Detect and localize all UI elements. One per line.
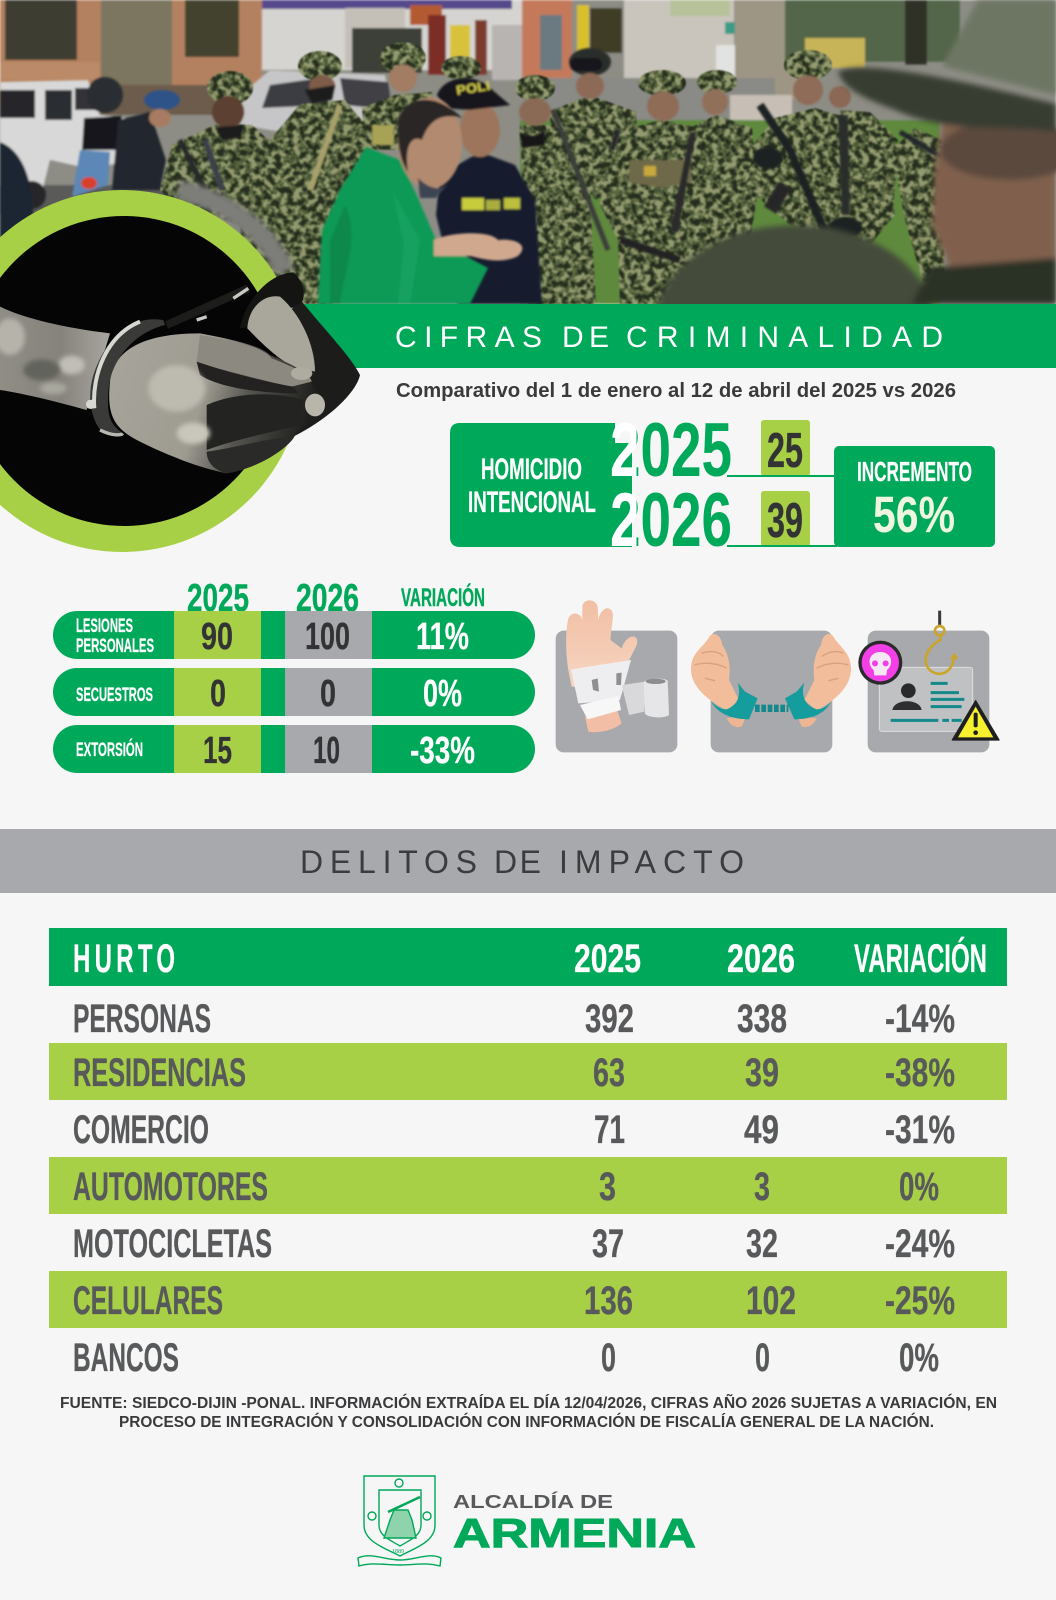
section heading: IMPACTO	[559, 844, 744, 880]
logo: Alcaldía de Armenia	[358, 1476, 696, 1566]
row bancos: 0	[601, 1336, 616, 1380]
handcuffed hands	[0, 272, 360, 473]
row residencias	[49, 1043, 1007, 1100]
photo background: street and buildings	[0, 0, 1056, 304]
row residencias: 39	[745, 1051, 779, 1095]
row: extorsion: 15	[203, 730, 232, 772]
row personas: PERSONAS	[73, 997, 211, 1041]
icon: coat of arms shield: 1889	[392, 1549, 404, 1555]
section heading	[300, 844, 744, 880]
row: lesiones personales: PERSONALES	[76, 636, 154, 657]
increment value: 56%	[873, 486, 955, 543]
row comercio: COMERCIO	[73, 1108, 209, 1152]
row motocicletas: -24%	[885, 1222, 955, 1266]
green box	[450, 423, 632, 547]
lime ring	[0, 190, 303, 552]
row motocicletas: 37	[592, 1222, 624, 1266]
table header: 2026	[727, 937, 795, 981]
black disc	[0, 216, 279, 526]
source note: FUENTE: SIEDCO-DIJIN -PONAL. INFORMACIÓN EXTRAÍDA EL DÍA 12/04/2026, CIFRAS AÑO 2026 SUJETAS A VARIACIÓN, EN	[60, 1392, 997, 1412]
row personas: -14%	[885, 997, 955, 1041]
increment box	[834, 446, 995, 547]
blurred foreground officer shoulder	[656, 222, 934, 304]
table header	[49, 928, 1007, 986]
row celulares: -25%	[885, 1279, 955, 1323]
connector 2026	[727, 545, 837, 547]
row: lesiones personales: LESIONES	[76, 616, 133, 637]
circular handcuffs image	[0, 190, 360, 552]
row bancos: BANCOS	[73, 1336, 179, 1380]
police officer in navy uniform	[436, 78, 542, 304]
header 2025: 2025	[187, 577, 249, 620]
row automotores: AUTOMOTORES	[73, 1165, 268, 1209]
row celulares: 136	[584, 1279, 633, 1323]
small comparison table	[53, 577, 535, 773]
row residencias: RESIDENCIAS	[73, 1051, 246, 1095]
row: extorsion: EXTORSIÓN	[76, 739, 143, 761]
row bancos: 0	[755, 1336, 770, 1380]
green title band	[300, 304, 1056, 368]
row celulares: 102	[746, 1279, 796, 1323]
section heading: DE	[494, 844, 541, 880]
soldier faces, straps and rifles	[180, 48, 938, 260]
section heading: DELITOS	[300, 844, 477, 880]
table header: HURTO	[73, 936, 175, 980]
row motocicletas: 32	[746, 1222, 778, 1266]
icon: handcuffed hands	[691, 631, 851, 752]
row: lesiones personales	[53, 611, 535, 659]
title	[395, 321, 943, 354]
row: secuestros: SECUESTROS	[76, 685, 153, 706]
blurred foreground officer head and hat	[838, 0, 1056, 304]
row automotores: 3	[754, 1165, 770, 1209]
theft table	[49, 928, 1007, 1380]
row: extorsion: 10	[313, 730, 340, 772]
row: extorsion	[53, 725, 535, 773]
row personas: 338	[737, 997, 787, 1041]
row: secuestros	[53, 668, 535, 716]
mayor in green jacket	[318, 97, 522, 304]
year 2026: 2026	[610, 478, 732, 563]
subtitle: Comparativo del 1 de enero al 12 de abril del 2025 vs 2026	[396, 380, 956, 402]
year 2025: 2025	[610, 408, 732, 493]
row: secuestros: 0	[320, 673, 336, 715]
increment label: INCREMENTO	[857, 456, 972, 487]
row automotores: 0%	[899, 1165, 939, 1209]
homicide label second line: INTENCIONAL	[468, 486, 596, 519]
value 2025: 25	[767, 424, 803, 478]
connector 2025	[727, 475, 837, 477]
row comercio: 71	[594, 1108, 625, 1152]
title: DE	[562, 321, 609, 354]
row: extorsion: -33%	[410, 730, 475, 772]
soldiers in camouflage	[160, 42, 945, 304]
title: CRIMINALIDAD	[626, 321, 943, 354]
icon: coat of arms shield	[358, 1476, 441, 1566]
title: CIFRAS	[395, 321, 542, 354]
header 2026: 2026	[296, 577, 359, 620]
source note: PROCESO DE INTEGRACIÓN Y CONSOLIDACIÓN CON INFORMACIÓN DE FISCALÍA GENERAL DE LA NACIÓN.	[119, 1412, 934, 1431]
grey blur behind circle	[178, 190, 285, 272]
wordmark ARMENIA: ARMENIA	[453, 1510, 696, 1556]
row celulares	[49, 1271, 1007, 1328]
row automotores	[49, 1157, 1007, 1214]
source note	[60, 1392, 997, 1431]
row residencias: -38%	[885, 1051, 955, 1095]
row comercio: 49	[744, 1108, 779, 1152]
row automotores: 3	[599, 1165, 616, 1209]
row: secuestros: 0%	[423, 673, 462, 715]
lime value box 2026	[761, 491, 810, 547]
row bancos	[73, 1336, 939, 1380]
row personas	[73, 997, 955, 1041]
icon: bandaged hand	[556, 600, 677, 752]
hero photo: soldiers, mayor and police officer on a street	[0, 0, 1056, 304]
row motocicletas: MOTOCICLETAS	[73, 1222, 272, 1266]
row celulares: CELULARES	[73, 1279, 223, 1323]
row residencias: 63	[593, 1051, 625, 1095]
homicide panel	[450, 408, 995, 563]
grey section band	[0, 829, 1056, 893]
vehicles and bystanders	[0, 70, 395, 240]
row comercio	[73, 1108, 955, 1152]
row comercio: -31%	[885, 1108, 955, 1152]
icon: phishing identity card	[858, 611, 999, 752]
row motocicletas	[73, 1222, 955, 1266]
row bancos: 0%	[899, 1336, 939, 1380]
police officer in navy uniform: POLI	[455, 78, 491, 98]
row: secuestros: 0	[210, 673, 226, 715]
wordmark top line: ALCALDÍA DE	[453, 1491, 613, 1512]
table header: 2025	[574, 937, 641, 981]
row: lesiones personales: 100	[305, 616, 350, 658]
header variation: VARIACIÓN	[401, 582, 485, 612]
homicide label: HOMICIDIO	[481, 453, 582, 486]
row personas: 392	[585, 997, 634, 1041]
row: lesiones personales: 11%	[416, 616, 469, 658]
lime value box 2025	[761, 420, 810, 476]
value 2026: 39	[767, 494, 803, 548]
row: lesiones personales: 90	[201, 616, 233, 658]
